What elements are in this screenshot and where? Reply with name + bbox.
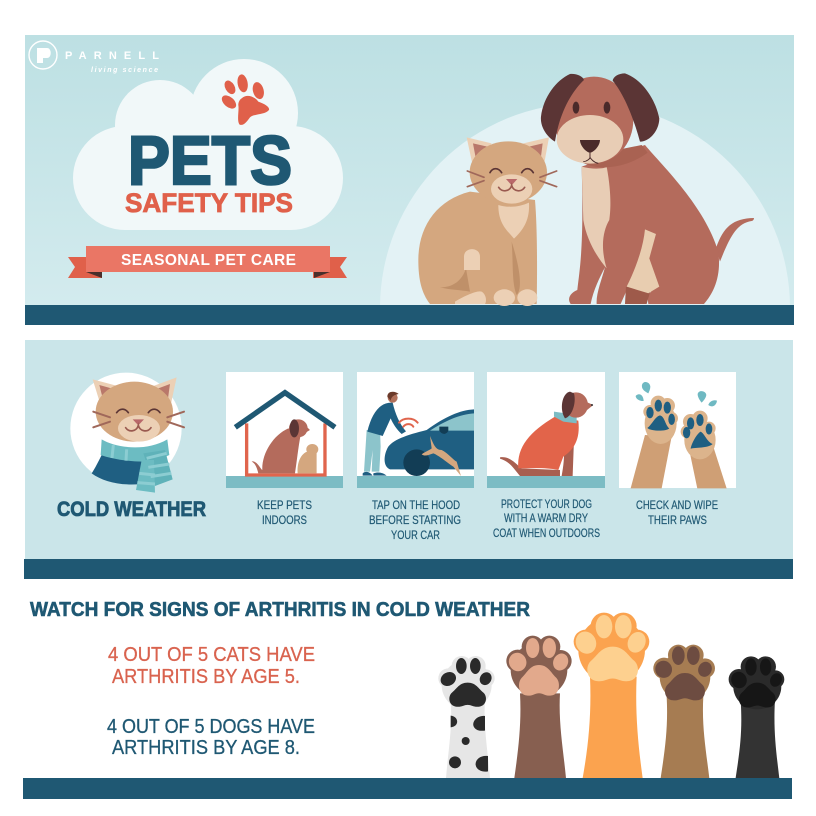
tip: keep pets indoors: INDOORS	[262, 513, 307, 527]
illustration: cat in scarf	[70, 373, 184, 493]
footer bar	[23, 778, 792, 799]
icon: red paw	[219, 74, 269, 125]
panel: cold weather	[24, 340, 793, 579]
icon: man tapping car	[363, 392, 474, 476]
ribbon: Seasonal Pet Care	[68, 246, 347, 278]
paw: orange	[572, 613, 649, 778]
icon: two wet paws	[631, 382, 727, 488]
stat: cats: ARTHRITIS BY AGE 5.	[112, 666, 300, 688]
tip: keep pets indoors: KEEP PETS	[257, 498, 312, 512]
stat: dogs: ARTHRITIS BY AGE 8.	[112, 737, 300, 759]
title: PETS: PETS	[128, 122, 292, 199]
icon: house with pets	[235, 393, 335, 475]
tip: warm coat: PROTECT YOUR DOG	[501, 497, 592, 511]
tip: wipe paws: THEIR PAWS	[648, 513, 707, 527]
illustration: dog	[541, 73, 754, 304]
tip: wipe paws: CHECK AND WIPE	[636, 498, 718, 512]
logo: Parnell: PARNELL	[65, 50, 159, 62]
stat: cats: 4 OUT OF 5 CATS HAVE	[108, 644, 315, 666]
panel: header	[25, 35, 794, 325]
cloud	[73, 59, 343, 230]
heading: arthritis: WATCH FOR SIGNS OF ARTHRITIS IN COLD WEATHER	[30, 598, 530, 621]
stat: dogs: 4 OUT OF 5 DOGS HAVE	[107, 716, 315, 738]
illustration: cat	[418, 137, 557, 306]
paw: tan	[652, 645, 715, 778]
cold weather bar	[24, 559, 793, 579]
tip: tap on the hood	[357, 372, 474, 542]
subtitle: Safety Tips: SAFETY TIPS	[125, 188, 293, 218]
stat: cats	[108, 644, 315, 688]
tip: tap on the hood: BEFORE STARTING	[369, 513, 461, 527]
stat: dogs	[107, 716, 315, 759]
paw: dalmatian	[438, 656, 495, 778]
logo: Parnell	[29, 41, 159, 74]
tip: keep pets indoors	[226, 372, 343, 527]
tip: tap on the hood: TAP ON THE HOOD	[372, 498, 460, 512]
tip: warm coat: WITH A WARM DRY	[504, 511, 588, 525]
semicircle backdrop	[380, 108, 790, 305]
paw: black	[728, 656, 784, 778]
logo: Parnell: living science	[91, 67, 158, 74]
icon: dog in coat	[500, 392, 593, 476]
ribbon: Seasonal Pet Care: SEASONAL PET CARE	[121, 252, 296, 269]
tip: tap on the hood: YOUR CAR	[391, 528, 440, 542]
illustration: five raised paws	[438, 613, 784, 778]
paw: brown	[506, 636, 572, 778]
tip: wipe paws	[619, 372, 736, 527]
header bar	[25, 305, 794, 325]
heading: Cold Weather: COLD WEATHER	[57, 498, 206, 521]
tip: warm coat	[487, 372, 605, 540]
tip: warm coat: COAT WHEN OUTDOORS	[493, 526, 600, 540]
